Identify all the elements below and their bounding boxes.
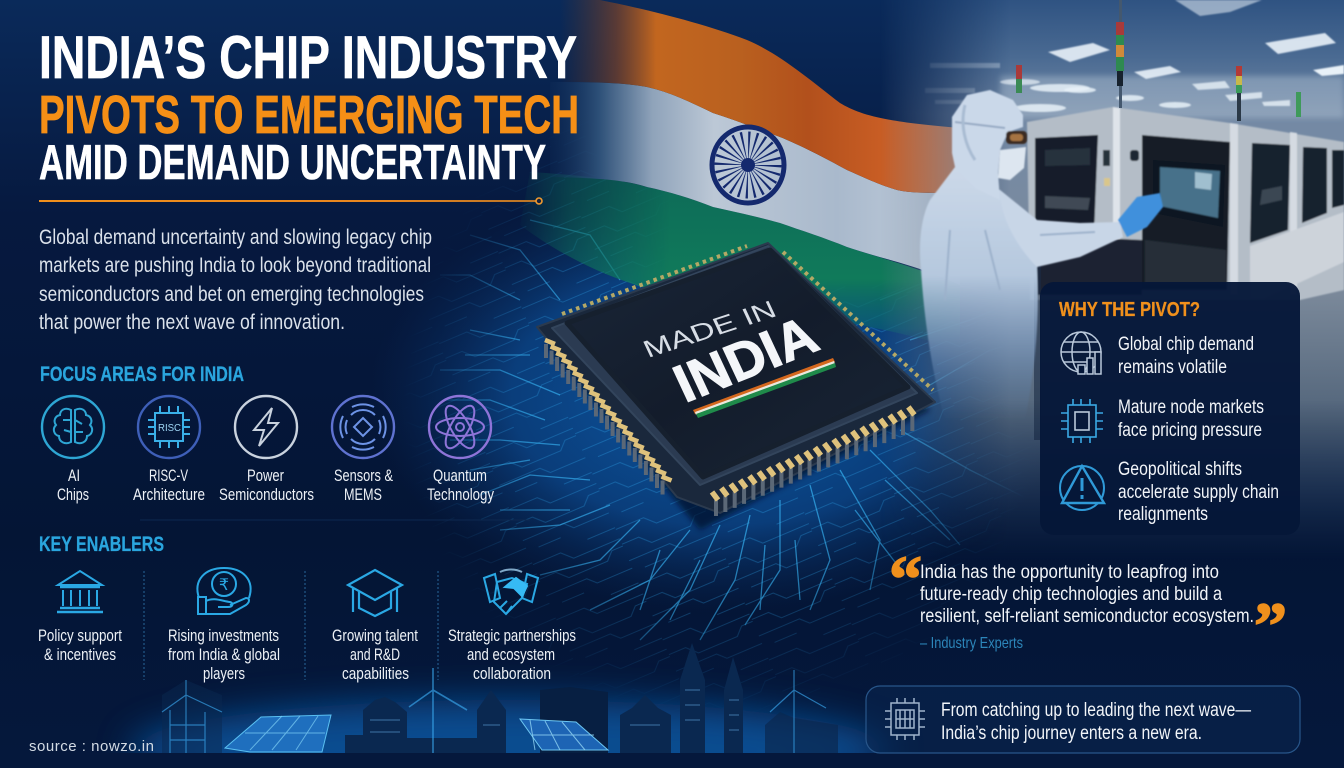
label: RISC-V Architecture xyxy=(133,466,205,504)
label: growing talent: and R&D xyxy=(350,645,400,664)
icon: AI chips brain xyxy=(42,396,104,458)
icon: rupee investment hand xyxy=(197,568,251,614)
text: demand volatile: remains volatile xyxy=(1118,357,1227,378)
background xyxy=(0,0,1014,696)
title line 3: AMID DEMAND UNCERTAINTY xyxy=(39,136,546,190)
icon: handshake xyxy=(484,569,538,614)
solar panels right xyxy=(520,719,608,750)
technician face mask xyxy=(998,147,1026,180)
icon: chip circuit xyxy=(885,698,925,740)
temple tower xyxy=(477,690,506,753)
callout text xyxy=(941,700,1251,744)
text: geopolitical shifts: Geopolitical shifts xyxy=(1118,459,1242,480)
icon: policy bank xyxy=(57,571,103,612)
text: pricing pressure: Mature node markets xyxy=(1118,397,1264,418)
panel: why the pivot xyxy=(1040,282,1300,535)
callout text: From catching up to leading the next wave— xyxy=(941,700,1251,721)
chip: package xyxy=(537,243,935,513)
text: geopolitical shifts xyxy=(1118,459,1279,525)
solar panels left xyxy=(225,715,331,752)
icon: quantum atom xyxy=(429,396,491,458)
chip: gold pins xyxy=(545,340,914,500)
icon: RISC-V chip: RISC xyxy=(158,423,181,434)
label: policy support: Policy support xyxy=(38,626,122,645)
label: AI Chips: AI xyxy=(68,466,80,485)
text: demand volatile xyxy=(1118,334,1254,378)
quote text: resilient, self-reliant semiconductor ecosystem. xyxy=(920,606,1254,627)
chip label: MADE IN: MADE IN xyxy=(639,296,781,363)
text: geopolitical shifts: accelerate supply chain xyxy=(1118,482,1279,503)
quote attribution: – Industry Experts xyxy=(920,635,1023,652)
chip: bevel xyxy=(552,246,917,485)
left building xyxy=(162,680,222,753)
flag: green band xyxy=(526,172,928,338)
label: strategic partnerships: and ecosystem xyxy=(467,645,555,664)
technician arm xyxy=(1000,190,1123,267)
intro paragraph: that power the next wave of innovation. xyxy=(39,311,345,334)
key enablers xyxy=(38,568,576,683)
icon: rupee investment hand: ₹ xyxy=(219,575,229,594)
label: growing talent: Growing talent xyxy=(332,626,418,645)
text: pricing pressure xyxy=(1118,397,1264,441)
text: geopolitical shifts: realignments xyxy=(1118,504,1208,525)
title xyxy=(39,24,579,190)
expert quote xyxy=(889,543,1287,663)
label: Power Semiconductors xyxy=(219,466,314,504)
ceiling lights xyxy=(1000,0,1344,112)
icon: graduation cap xyxy=(348,570,402,616)
icon: warning triangle xyxy=(1060,466,1104,510)
label: Sensors and MEMS: Sensors & xyxy=(334,466,393,485)
text: demand volatile: Global chip demand xyxy=(1118,334,1254,355)
technician hood xyxy=(952,90,1023,200)
icon: sensors and MEMS xyxy=(332,396,394,458)
chip: tricolor stripe xyxy=(693,358,836,418)
clock towers xyxy=(680,643,705,753)
intro paragraph: semiconductors and bet on emerging technologies xyxy=(39,283,424,306)
technician body xyxy=(920,167,1038,420)
chip: front pin leads xyxy=(546,344,912,516)
chip: top surface xyxy=(567,250,908,477)
chip: rear pins xyxy=(562,246,933,390)
icon: globe and bars xyxy=(1061,332,1101,374)
label: Quantum Technology xyxy=(427,466,494,504)
label: AI Chips: Chips xyxy=(57,485,89,504)
technician in cleanroom suit xyxy=(920,90,1163,420)
label: Quantum Technology: Technology xyxy=(427,485,494,504)
label: rising investments xyxy=(168,626,280,683)
focus areas xyxy=(42,396,494,504)
label: strategic partnerships: collaboration xyxy=(473,664,551,683)
label: strategic partnerships: Strategic partnerships xyxy=(448,626,576,645)
intro paragraph: Global demand uncertainty and slowing legacy chip xyxy=(39,226,432,249)
label: rising investments: Rising investments xyxy=(168,626,279,645)
quote text: India has the opportunity to leapfrog into xyxy=(920,562,1219,583)
heading: focus areas: FOCUS AREAS FOR INDIA xyxy=(40,363,244,386)
chip shadow xyxy=(545,260,930,530)
label: Power Semiconductors: Semiconductors xyxy=(219,485,314,504)
title line 2: PIVOTS TO EMERGING TECH xyxy=(39,85,579,145)
wind turbines xyxy=(409,668,467,753)
icon: chip xyxy=(1061,399,1103,443)
panel heading: WHY THE PIVOT? xyxy=(1059,299,1200,321)
closing quotation mark: ” xyxy=(1254,590,1287,663)
label: Sensors and MEMS: MEMS xyxy=(344,485,382,504)
label: policy support xyxy=(38,626,122,664)
source credit: source : nowzo.in xyxy=(29,738,154,755)
quote text xyxy=(920,562,1254,627)
haze behind machines xyxy=(1000,76,1344,118)
label: Power Semiconductors: Power xyxy=(247,466,284,485)
heading: key enablers: KEY ENABLERS xyxy=(39,533,164,556)
flag: ashoka chakra xyxy=(712,127,784,203)
opening quotation mark: “ xyxy=(889,543,922,616)
intro paragraph: markets are pushing India to look beyond traditional xyxy=(39,254,431,277)
machines xyxy=(1027,107,1344,300)
title underline xyxy=(39,198,542,204)
callout: new era xyxy=(866,686,1300,753)
label: Sensors and MEMS xyxy=(334,466,393,504)
label: rising investments: players xyxy=(203,664,245,683)
flag: orange band xyxy=(560,0,960,193)
label: growing talent xyxy=(332,626,418,683)
icon: RISC-V chip xyxy=(138,396,200,458)
label: rising investments: from India & global xyxy=(168,645,280,664)
text: pricing pressure: face pricing pressure xyxy=(1118,420,1262,441)
label: growing talent: capabilities xyxy=(342,664,409,683)
skyline silhouettes xyxy=(0,643,1344,768)
quote text: future-ready chip technologies and build a xyxy=(920,584,1222,605)
signal towers xyxy=(1016,0,1301,121)
chip label: INDIA: INDIA xyxy=(665,305,827,414)
label: policy support: & incentives xyxy=(44,645,116,664)
title line 1: INDIA’S CHIP INDUSTRY xyxy=(39,24,577,91)
technician glove xyxy=(1118,193,1163,237)
flag: white band xyxy=(550,82,960,285)
icon: power bolt xyxy=(235,396,297,458)
label: RISC-V Architecture: RISC-V xyxy=(149,466,188,485)
intro paragraph xyxy=(39,226,432,334)
label: strategic partnerships xyxy=(448,626,576,683)
dark buildings xyxy=(363,697,407,753)
photo: cleanroom fab xyxy=(880,0,1344,570)
control screen xyxy=(1153,160,1225,227)
label: AI Chips xyxy=(57,466,89,504)
callout text: India’s chip journey enters a new era. xyxy=(941,723,1202,744)
label: Quantum Technology: Quantum xyxy=(433,466,487,485)
label: RISC-V Architecture: Architecture xyxy=(133,485,205,504)
flag of India xyxy=(520,0,960,350)
microchip: Made in India xyxy=(537,243,935,530)
